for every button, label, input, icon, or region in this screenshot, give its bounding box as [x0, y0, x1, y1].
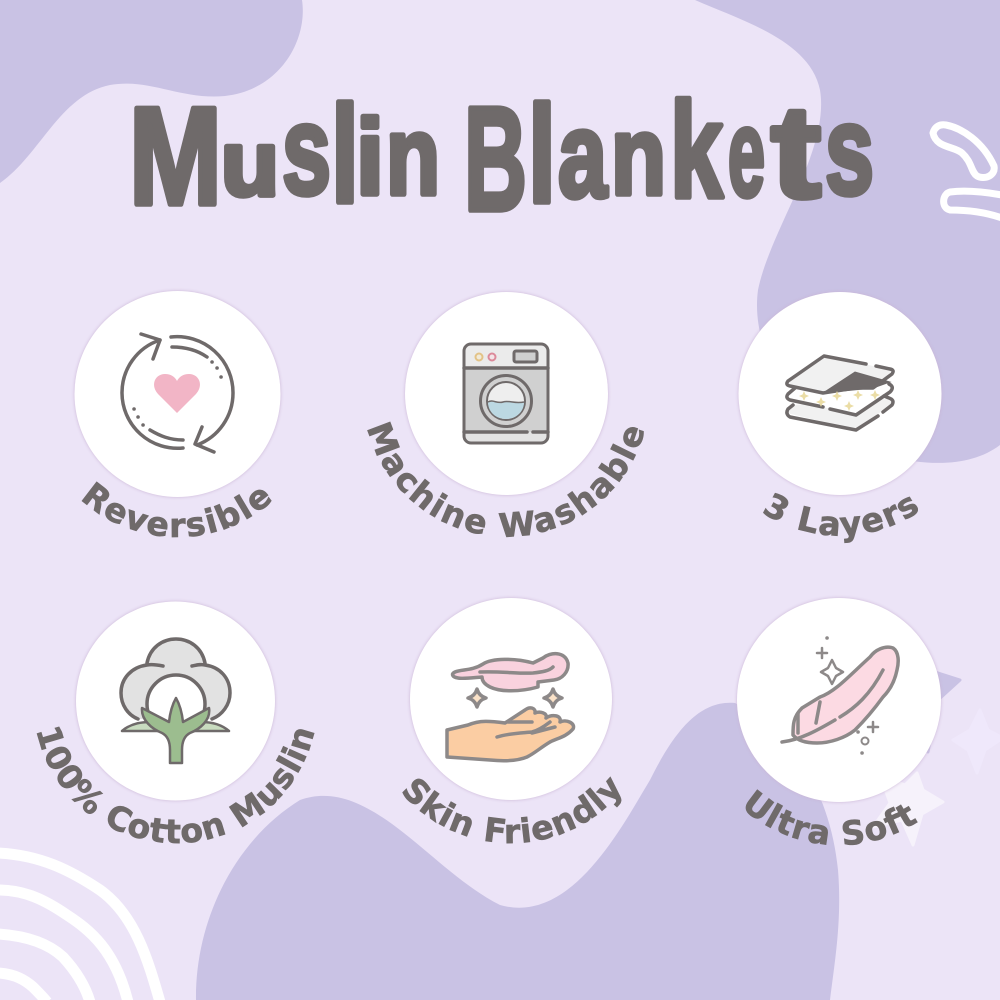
circle: cotton [76, 602, 275, 800]
arcs: bottom left [0, 853, 160, 1000]
title: k [670, 74, 723, 226]
title: i [356, 97, 384, 217]
panel: 100% cotton muslin [36, 600, 314, 844]
icon: feather with sparkles [782, 638, 898, 753]
icon: cotton boll [121, 639, 230, 763]
panel: ultra soft [736, 596, 942, 846]
icon: washing machine [464, 344, 548, 443]
title: n [386, 94, 440, 218]
title: n [611, 94, 666, 218]
blob: bottom [196, 703, 839, 1000]
circle: reversible [74, 291, 280, 497]
label: Skin Friendly: Skin Friendly [402, 776, 622, 844]
blob: top right [695, 0, 1000, 463]
panel: reversible [73, 290, 282, 538]
panel: 3 layers [737, 292, 942, 544]
icon: hand and feather [447, 654, 574, 761]
title: t [771, 78, 821, 225]
circle: ultra soft [737, 598, 941, 802]
blob: top left [0, 0, 303, 183]
circle: skin friendly [410, 598, 612, 800]
title: B [464, 77, 527, 242]
title: M [129, 79, 222, 234]
title: u [221, 113, 279, 215]
label: 100% Cotton Muslin: 100% Cotton Muslin [36, 726, 314, 844]
title: s [282, 80, 331, 221]
label: Machine Washable: Machine Washable [367, 422, 644, 538]
title: l [528, 78, 556, 232]
panel: machine washable [367, 290, 644, 538]
label: 3 Layers: 3 Layers [763, 492, 918, 544]
title: l [331, 78, 359, 232]
squiggles: top right [933, 125, 1000, 218]
icon: reversible arrows with heart [122, 334, 233, 452]
title: e [728, 85, 765, 223]
star: white [873, 773, 943, 845]
star: pale [953, 710, 1000, 773]
title: a [558, 87, 608, 223]
title: s [825, 80, 874, 221]
circle: 3 layers [738, 292, 942, 495]
label: Ultra Soft: Ultra Soft [746, 789, 918, 846]
circle: machine washable [405, 292, 608, 495]
panel: skin friendly [402, 596, 622, 844]
star: purple [900, 672, 960, 752]
icon: three fabric layers [787, 356, 893, 430]
label: Reversible: Reversible [82, 481, 272, 538]
